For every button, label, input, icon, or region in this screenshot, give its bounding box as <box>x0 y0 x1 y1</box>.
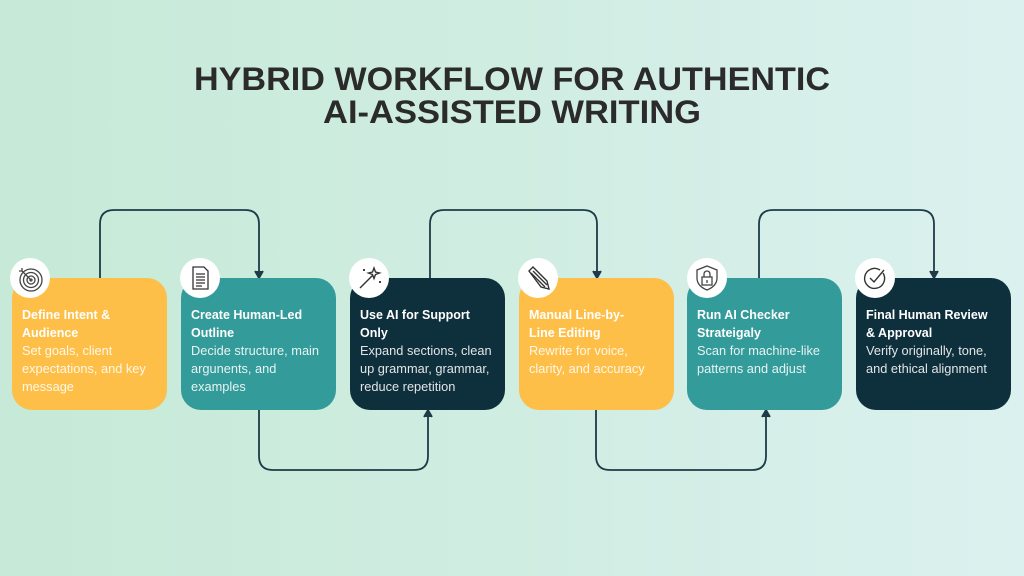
card 6 <box>856 278 1011 410</box>
card 1: Define Intent & <box>22 308 110 322</box>
card 3: Expand sections, clean <box>360 343 492 358</box>
card 4: Rewrite for voice, <box>529 343 628 358</box>
card 5: patterns and adjust <box>697 361 806 376</box>
arrow: 5 to 6 <box>759 210 938 278</box>
title: AI-ASSISTED WRITING <box>323 94 701 130</box>
card 1: Set goals, client <box>22 343 112 358</box>
title <box>194 61 830 130</box>
card 6: Final Human Review <box>866 308 988 322</box>
card 6: Verify originally, tone, <box>866 343 987 358</box>
card 3: Use AI for Support <box>360 308 470 322</box>
card 4: Line Editing <box>529 326 601 340</box>
card 1: Audience <box>22 326 78 340</box>
card 3: Only <box>360 326 388 340</box>
card 6: and ethical alignment <box>866 361 987 376</box>
card 1: message <box>22 379 74 394</box>
card 3: up grammar, grammar, <box>360 361 489 376</box>
card 2: Create Human-Led <box>191 308 302 322</box>
card 1: expectations, and key <box>22 361 146 376</box>
icon: pencil <box>518 258 558 298</box>
title: HYBRID WORKFLOW FOR AUTHENTIC <box>194 61 830 97</box>
card 2: Outline <box>191 326 234 340</box>
card 5: Strateigaly <box>697 326 761 340</box>
icon: check <box>855 258 895 298</box>
card 3 <box>350 278 505 410</box>
card 5 <box>687 278 842 410</box>
card 2: examples <box>191 379 246 394</box>
card 2 <box>181 278 336 410</box>
arrow: 3 to 4 <box>430 210 601 278</box>
card 5: Scan for machine-like <box>697 343 820 358</box>
arrow: 2 to 3 <box>259 410 432 470</box>
icon: target <box>10 258 50 298</box>
card 2: argunents, and <box>191 361 276 376</box>
card 1 <box>12 278 167 410</box>
card 4: clarity, and accuracy <box>529 361 645 376</box>
arrow: 1 to 2 <box>100 210 263 278</box>
arrow: 4 to 5 <box>596 410 770 470</box>
card 4: Manual Line-by- <box>529 308 624 322</box>
icon: shield lock <box>687 258 727 298</box>
card 3: reduce repetition <box>360 379 455 394</box>
card 4 <box>519 278 674 410</box>
icon: magic wand <box>349 258 389 298</box>
card 6: & Approval <box>866 326 932 340</box>
card 5: Run AI Checker <box>697 308 790 322</box>
icon: document <box>180 258 220 298</box>
card 2: Decide structure, main <box>191 343 319 358</box>
